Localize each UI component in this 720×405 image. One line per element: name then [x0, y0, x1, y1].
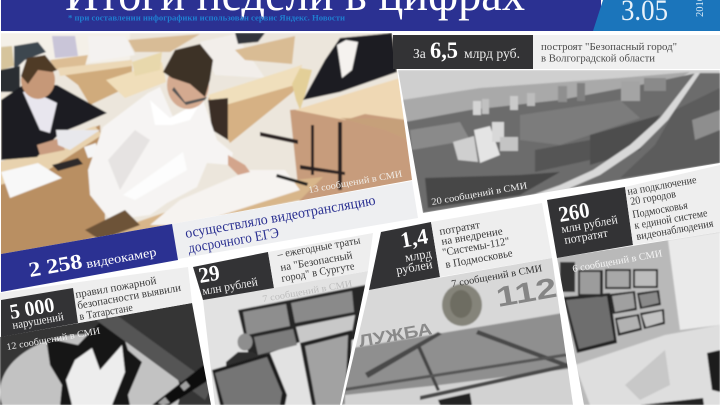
description: видеонаблюдения	[635, 218, 714, 243]
figure: нарушений	[11, 311, 65, 332]
dark label	[547, 187, 633, 258]
light strip	[431, 203, 552, 277]
description: "Системы-112"	[441, 235, 510, 259]
figure: 1,4	[398, 223, 430, 253]
mentions: 6 сообщений в СМИ	[572, 248, 663, 275]
figure: 29	[197, 260, 222, 288]
mentions: 7 сообщений в СМИ	[451, 263, 543, 290]
figure: видеокамер	[85, 245, 157, 271]
description	[438, 219, 514, 271]
description: на внедрение	[440, 225, 504, 248]
description: в Подмосковье	[444, 247, 514, 271]
photo: rescue service hall: 112	[494, 272, 559, 313]
mentions: 12 сообщений в СМИ	[6, 326, 101, 353]
figure	[27, 245, 157, 282]
description	[541, 42, 677, 64]
mentions: 7 сообщений в СМИ	[262, 278, 353, 305]
description: в Волгоградской области	[541, 54, 655, 64]
description: на "Безопасный	[279, 249, 354, 274]
panel: Tatarstan fire safety	[0, 267, 215, 405]
photo: control room	[200, 265, 375, 405]
figure: млн рублей	[560, 212, 619, 236]
description: в Татарстане	[78, 302, 134, 323]
figure: потратят	[563, 225, 610, 247]
description: – ежегодные траты	[276, 234, 362, 261]
photo: monitor wall	[555, 230, 720, 405]
description: Подмосковья	[631, 199, 689, 221]
dark label	[393, 35, 533, 69]
blue label	[1, 224, 178, 292]
description: город" в Сургуте	[280, 260, 356, 285]
description: правил пожарной	[74, 275, 157, 301]
text strip	[172, 181, 418, 260]
figure	[197, 260, 259, 298]
dark label	[1, 288, 78, 337]
figure: млрд	[404, 246, 433, 265]
figure: млн рублей	[201, 274, 259, 298]
figure: млрд руб.	[464, 46, 520, 61]
figure: 5 000	[8, 292, 56, 324]
figure: рублей	[395, 257, 434, 277]
photo: flame emblem	[0, 300, 215, 405]
panel: Volgograd safe city	[393, 35, 720, 215]
description: досрочного ЕГЭ	[187, 225, 280, 257]
dark label	[193, 252, 274, 300]
mentions: 13 сообщений в СМИ	[308, 169, 403, 196]
dark label	[369, 222, 440, 290]
figure	[557, 197, 619, 247]
figure: За	[413, 46, 426, 61]
description: 20 городов	[629, 188, 677, 208]
light strip	[533, 35, 720, 69]
panel: Moscow region system 112	[340, 203, 575, 405]
panel: Surgut safe city	[193, 233, 375, 405]
figure: 260	[557, 197, 591, 227]
light strip	[268, 233, 373, 288]
description	[276, 234, 362, 285]
photo: rescue service hall	[340, 255, 575, 405]
figure	[413, 38, 520, 63]
panel: exam video broadcast	[0, 33, 420, 292]
footnote: * при составлении инфографики использован сервис Яндекс. Новости	[68, 14, 345, 22]
description: на подключение	[626, 174, 698, 198]
photo: students at exam	[0, 33, 420, 258]
header band	[1, 0, 720, 31]
description: к единой системе	[633, 207, 708, 232]
figure: 6,5	[430, 38, 458, 63]
description	[626, 174, 714, 243]
figure	[395, 223, 434, 277]
light strip	[625, 165, 720, 245]
description: потратят	[438, 219, 481, 238]
description: осуществляло видеотрансляцию	[184, 193, 377, 242]
description	[74, 275, 182, 323]
description: безопасности выявили	[76, 282, 182, 312]
panel: Moscow region video surveillance	[547, 165, 720, 405]
description: построят "Безопасный город"	[541, 42, 677, 53]
figure: 2 258	[27, 249, 84, 282]
photo: rescue service hall: ЛУЖБА	[357, 319, 434, 351]
photo: aerial city	[395, 70, 720, 215]
light strip	[0, 267, 192, 323]
mentions: 20 сообщений в СМИ	[431, 180, 528, 208]
